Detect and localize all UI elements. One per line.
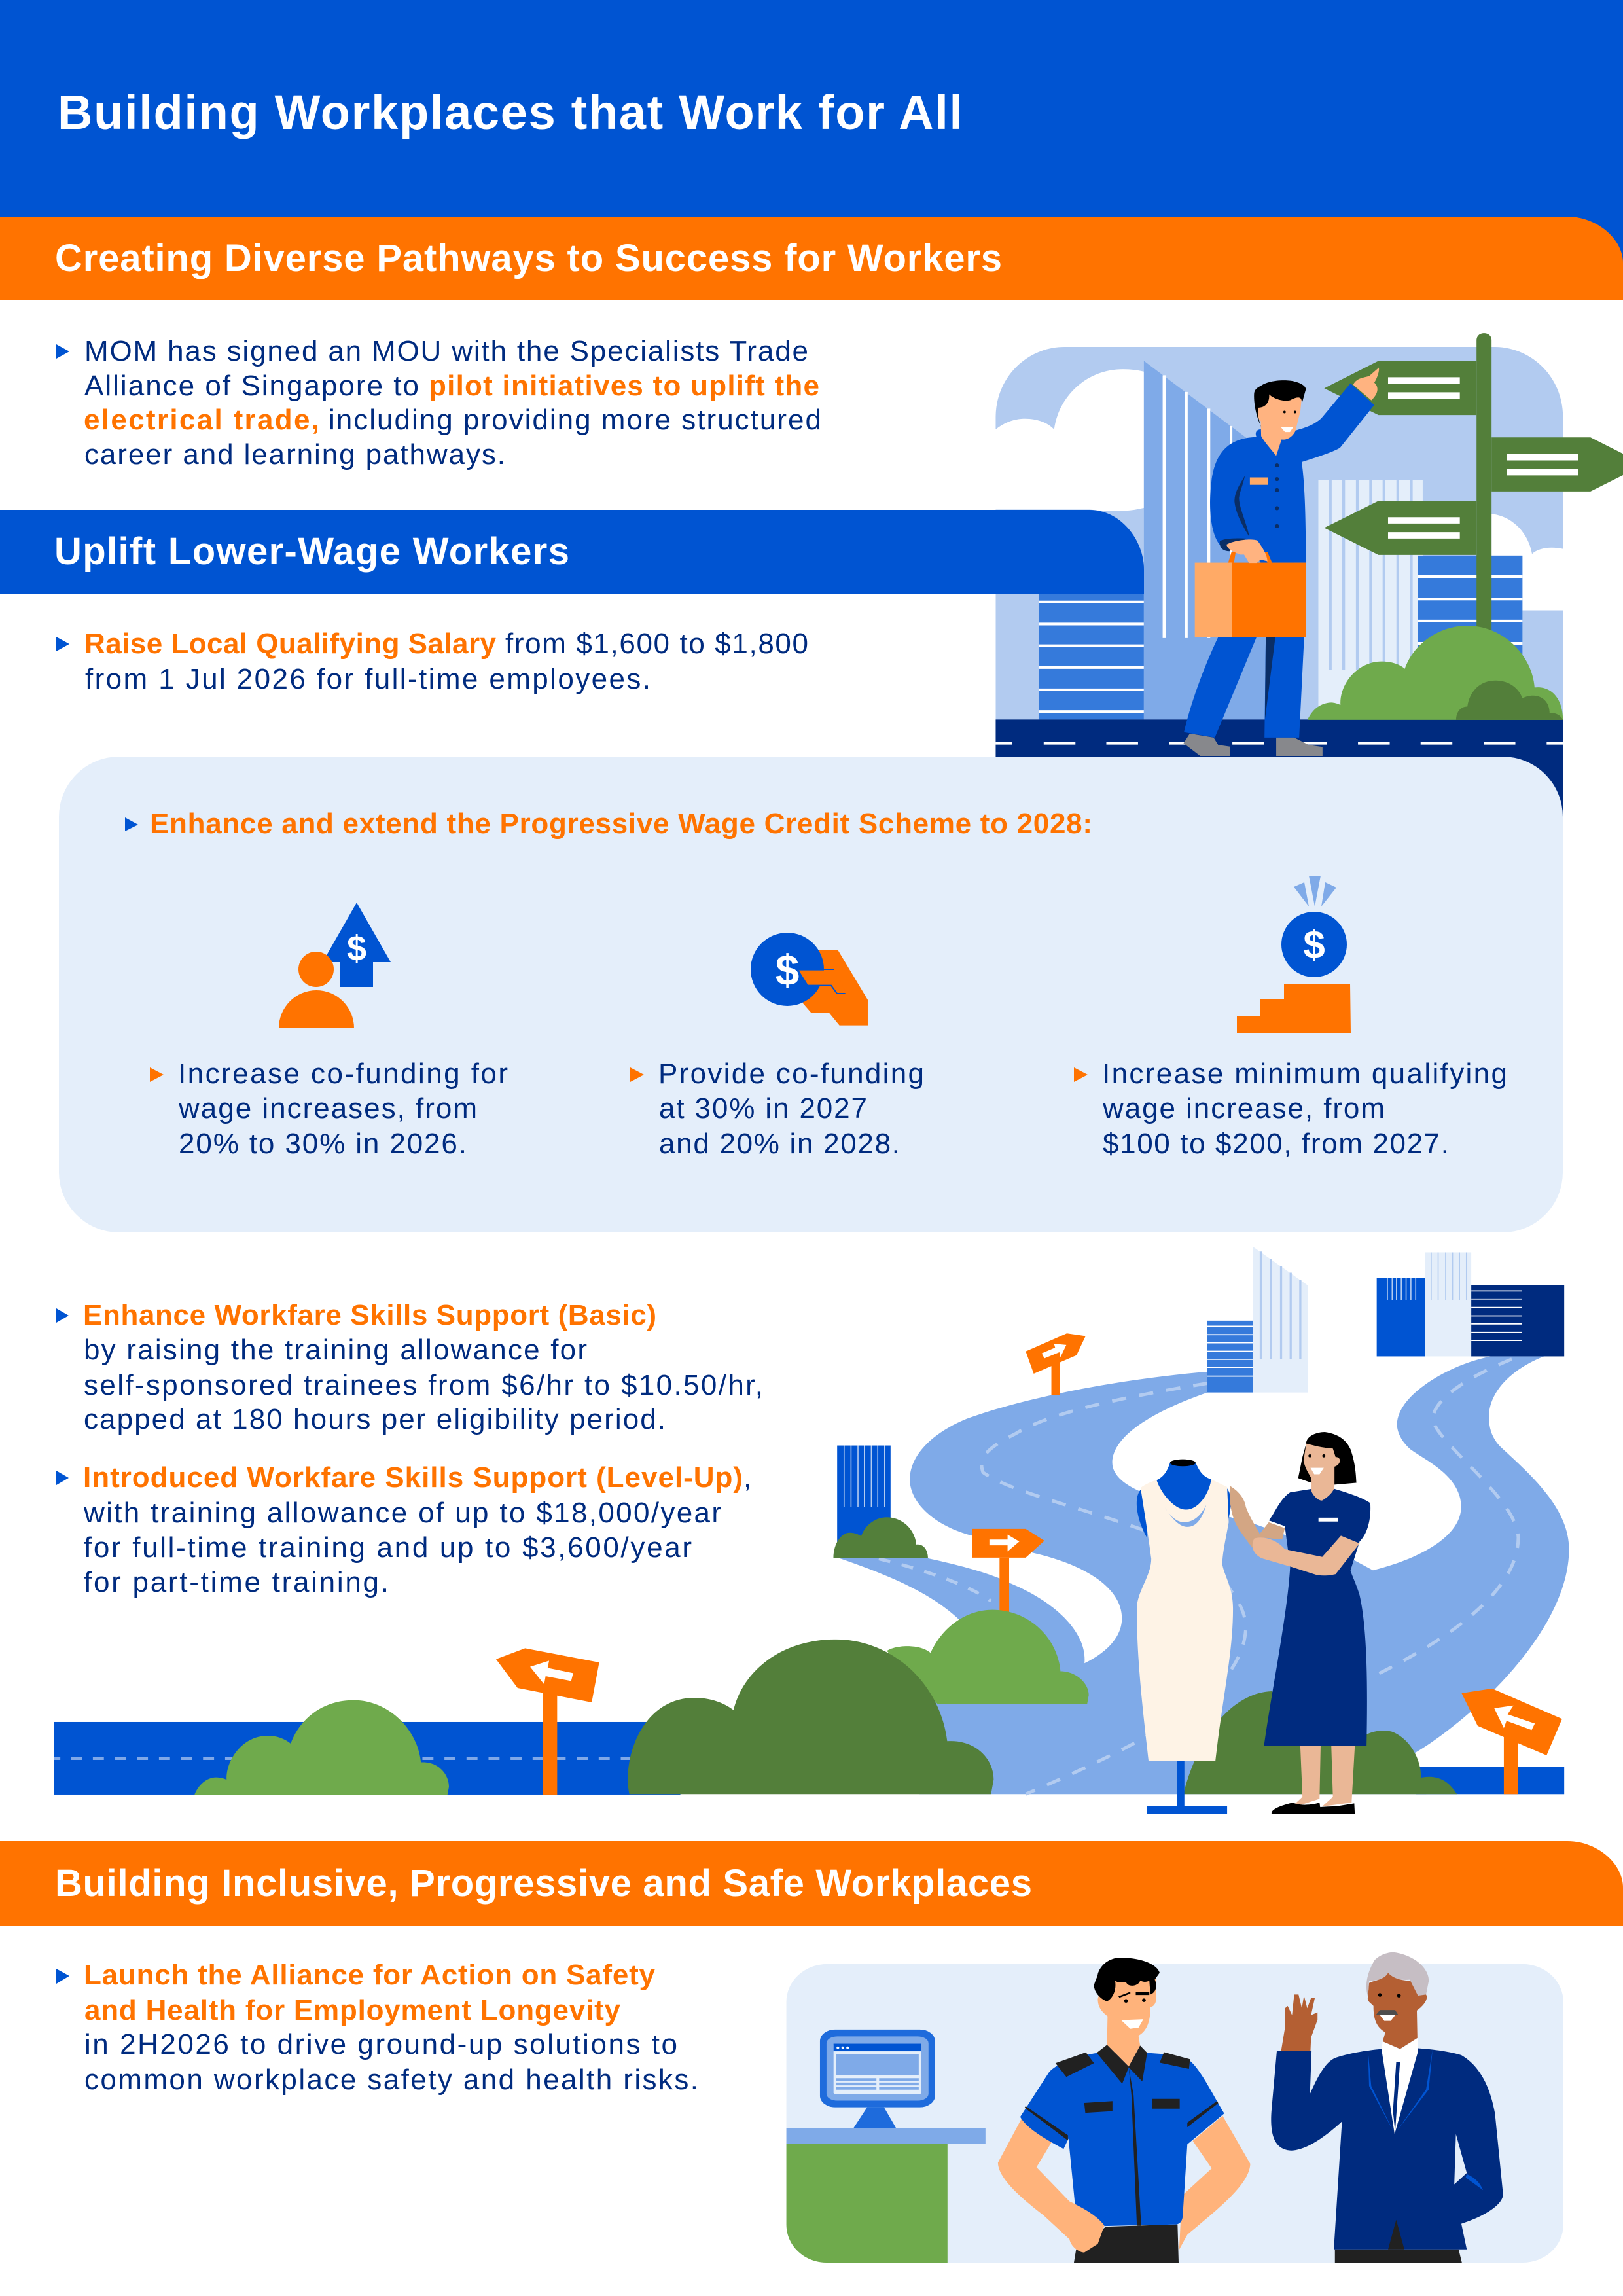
icon: hand with coin: $: [776, 946, 799, 994]
bullet arrow: [56, 344, 69, 359]
bush: [194, 1700, 449, 1795]
bullet text: Workfare Skills Support Level-Up: with training allowance of up to $18,000/year: [83, 1497, 721, 1529]
buildings right: [1377, 1252, 1564, 1356]
panel heading: Enhance and extend the Progressive Wage Credit Scheme to 2028:: [150, 808, 1092, 840]
column text: co-funding increase: [150, 1058, 508, 1160]
monitor: [820, 2030, 935, 2128]
column text: co-funding 2027-2028: at 30% in 2027: [659, 1092, 867, 1124]
header banner: [0, 0, 1623, 275]
bushes: [1308, 626, 1563, 720]
column text: minimum qualifying wage: [1074, 1058, 1507, 1160]
column text: co-funding 2027-2028: and 20% in 2028.: [659, 1128, 900, 1160]
bullet text: Workfare Skills Support Level-Up: for part-time training.: [84, 1566, 389, 1598]
signpost: [1324, 333, 1623, 632]
bullet text: Workfare Skills Support Basic: Enhance Workfare Skills Support (Basic): [83, 1299, 656, 1331]
column text: co-funding 2027-2028: Provide co-funding: [658, 1058, 924, 1090]
panel: Progressive Wage Credit Scheme: [59, 757, 1563, 1232]
column text: co-funding increase: wage increases, from: [178, 1092, 477, 1124]
bullet text: Workfare Skills Support Basic: [56, 1299, 763, 1435]
bullet text: qualifying salary: [56, 628, 808, 695]
illustration: winding road ground left: [54, 1648, 681, 1795]
bullet text: Alliance for Action: common workplace safety and health risks.: [84, 2064, 698, 2096]
section band: Building Inclusive: [0, 1841, 1623, 1926]
winding roads: [839, 1356, 1569, 1794]
worker figure: [1183, 368, 1379, 756]
icon: coin on steps: [1237, 876, 1351, 1033]
bullet text: Alliance for Action: in 2H2026 to drive ground-up solutions to: [84, 2028, 677, 2060]
section band: Creating Diverse Pathways: [0, 217, 1623, 300]
bullet text: qualifying salary: Raise Local Qualifying Salary: [84, 628, 497, 660]
road: [995, 719, 1563, 818]
bullet text: MOU: [56, 335, 821, 471]
road sign: [496, 1648, 599, 1795]
buildings centre: [1207, 1247, 1308, 1393]
illustration: roads, mannequin and tailor: [628, 1247, 1569, 1814]
panel: workplace illustration: [787, 1952, 1563, 2263]
icon: coin on steps: $: [1303, 923, 1325, 967]
bullet text: Alliance for Action: and Health for Employment Longevity: [84, 1994, 621, 2026]
section heading: Building Inclusive, Progressive and Safe Workplaces: [55, 1862, 1032, 1905]
column text: minimum qualifying wage: $100 to $200, from 2027.: [1103, 1128, 1449, 1160]
security officer: [998, 1958, 1250, 2263]
bullet text: MOU: MOM has signed an MOU with the Specialists Trade: [84, 335, 808, 367]
road sign bottom right: [1461, 1689, 1562, 1794]
illustration: worker at signpost: [969, 333, 1623, 818]
bullet text: MOU: including providing more structured: [329, 404, 821, 436]
bullet text: Workfare Skills Support Basic: by raising the training allowance for: [84, 1334, 587, 1366]
bullet text: Workfare Skills Support Level-Up: [56, 1462, 751, 1598]
title: Building Workplaces that Work for All: [58, 85, 963, 139]
bullet text: Workfare Skills Support Basic: self-sponsored trainees from $6/hr to $10.50/hr,: [84, 1369, 763, 1401]
building left with bush: [833, 1446, 928, 1558]
bullet text: MOU: pilot initiatives to uplift the: [429, 370, 819, 402]
section heading: Creating Diverse Pathways to Success for Workers: [55, 237, 1002, 279]
column text: minimum qualifying wage: wage increase, from: [1102, 1092, 1385, 1124]
icon: person with rising dollar arrow: [279, 903, 391, 1028]
column text: co-funding 2027-2028: [630, 1058, 924, 1160]
section heading: Uplift Lower-Wage Workers: [54, 530, 569, 573]
column text: co-funding increase: Increase co-funding for: [178, 1058, 508, 1090]
bullet arrow: [56, 637, 69, 651]
bullet text: Workfare Skills Support Basic: capped at 180 hours per eligibility period.: [84, 1403, 666, 1435]
bullet text: qualifying salary: from 1 Jul 2026 for full-time employees.: [85, 663, 651, 695]
column text: minimum qualifying wage: Increase minimum qualifying: [1102, 1058, 1507, 1090]
section band: Uplift Lower-Wage Workers: [0, 510, 1144, 594]
blue road bottom right: [1416, 1767, 1564, 1794]
column text: co-funding increase: 20% to 30% in 2026.: [179, 1128, 467, 1160]
bullet text: MOU: career and learning pathways.: [84, 439, 505, 471]
counter: [787, 2128, 986, 2263]
icon: person with rising dollar arrow: $: [347, 929, 366, 968]
bullet text: Workfare Skills Support Level-Up: Introduced Workfare Skills Support (Level-Up): [83, 1462, 743, 1494]
mannequin with dress: [1137, 1460, 1233, 1814]
bullet text: qualifying salary: from $1,600 to $1,800: [505, 628, 808, 660]
bullet text: Workfare Skills Support Level-Up: for full-time training and up to $3,600/year: [84, 1532, 692, 1564]
road sign middle: [972, 1529, 1044, 1615]
manager waving: [1271, 1952, 1503, 2263]
bullet text: MOU: Alliance of Singapore to: [84, 370, 419, 402]
bullet text: MOU: electrical trade,: [84, 404, 319, 436]
bushes: [628, 1610, 1457, 1794]
icon: hand with coin: [751, 933, 868, 1026]
road sign top: [1026, 1333, 1086, 1395]
bullet text: Workfare Skills Support Level-Up: ,: [743, 1462, 751, 1494]
bullet text: Alliance for Action: Launch the Alliance for Action on Safety: [84, 1959, 656, 1991]
tailor figure: [1230, 1432, 1370, 1814]
bullet text: Alliance for Action: [56, 1959, 698, 2096]
